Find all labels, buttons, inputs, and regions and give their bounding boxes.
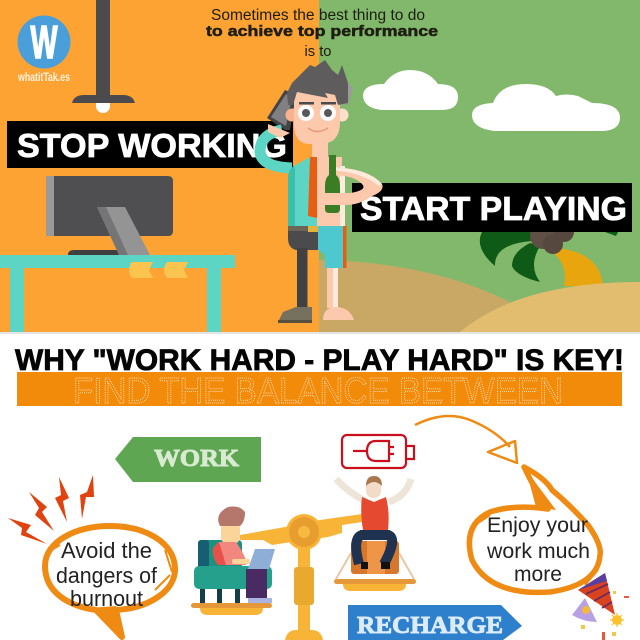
- cloud large: [472, 84, 620, 131]
- arrow label: work: [115, 437, 261, 482]
- banner: start playing: START PLAYING: [360, 190, 627, 227]
- hair: [340, 83, 353, 105]
- palm tree: [480, 222, 618, 286]
- raised arm with sleeve: [260, 130, 292, 168]
- ears: [286, 108, 298, 122]
- smile: [308, 128, 328, 132]
- speech bubble: enjoy: Enjoy your: [487, 513, 588, 537]
- speech bubble: enjoy: [469, 467, 600, 592]
- curved arrow: [415, 416, 517, 463]
- character half worker half beach: [260, 60, 383, 323]
- cushion: [351, 541, 399, 574]
- intro text: is to: [304, 44, 332, 60]
- subtitle bar: FIND THE BALANCE BETWEEN: [73, 370, 563, 411]
- speech bubble: enjoy: more: [514, 562, 562, 586]
- arrow label: work: WORK: [154, 446, 239, 472]
- speech bubble: enjoy: work much: [486, 539, 590, 563]
- logo: [17, 16, 71, 84]
- pan ropes: [336, 553, 414, 579]
- speech bubble: burnout: burnout: [70, 586, 143, 611]
- cloud small: [363, 70, 458, 110]
- computer monitor: [46, 176, 173, 255]
- arrow label: recharge: [348, 605, 522, 640]
- shoe: [278, 307, 312, 322]
- bare foot: [323, 307, 354, 320]
- desk: [0, 255, 235, 332]
- sticky tabs: [129, 262, 188, 278]
- hand over bottle: [322, 193, 345, 205]
- phone: [267, 90, 296, 130]
- speech bubble: burnout: [45, 526, 175, 638]
- laptop: [248, 549, 275, 569]
- banner: stop working: STOP WORKING: [17, 127, 287, 164]
- icon: battery plug: [342, 435, 414, 468]
- scale column: [298, 540, 310, 640]
- ceiling lamp: [72, 0, 135, 113]
- red vest: [361, 497, 389, 530]
- scale pivot: [286, 514, 322, 550]
- intro text: Sometimes the best thing to do: [211, 7, 425, 24]
- intro text: to achieve top performance: [206, 23, 438, 40]
- raised arms: [336, 479, 365, 501]
- hand on phone: [268, 124, 290, 138]
- beer bottle: [325, 155, 340, 213]
- panel: stop working office: [0, 0, 319, 332]
- right pan: [334, 579, 416, 584]
- icon: party popper: [572, 573, 629, 640]
- logo wordmark: whatitTak.es: [17, 70, 70, 84]
- legs: [356, 535, 392, 564]
- sand dunes: [319, 260, 510, 332]
- eyes: [298, 102, 336, 121]
- person relaxing on cushion: [336, 476, 414, 579]
- legs: [246, 569, 267, 598]
- arrow label: recharge: RECHARGE: [357, 613, 503, 639]
- balance scale: [191, 514, 416, 640]
- speech bubble: burnout: Avoid the: [61, 538, 152, 563]
- panel: start playing beach: [319, 0, 640, 332]
- armchair: [198, 540, 242, 570]
- head: [366, 477, 381, 498]
- icon: lightning bolts: [8, 475, 94, 544]
- teal shirt: [288, 157, 317, 227]
- head: [221, 522, 240, 544]
- bare leg: [327, 268, 338, 308]
- intro text: [206, 7, 438, 60]
- person working on laptop: [194, 507, 275, 603]
- dark trousers: [288, 226, 318, 250]
- main title: WHY "WORK HARD - PLAY HARD" IS KEY!: [15, 344, 624, 377]
- beach arm: [322, 167, 383, 205]
- logo letter: W: [30, 16, 58, 68]
- neck and chest: [312, 140, 328, 162]
- left pan: [191, 603, 272, 608]
- torso: [213, 542, 246, 565]
- teal shorts: [318, 226, 343, 268]
- orange tie: [308, 157, 317, 218]
- speech bubble: burnout: dangers of: [56, 563, 158, 588]
- face: [294, 88, 340, 144]
- scale beam: [240, 514, 362, 545]
